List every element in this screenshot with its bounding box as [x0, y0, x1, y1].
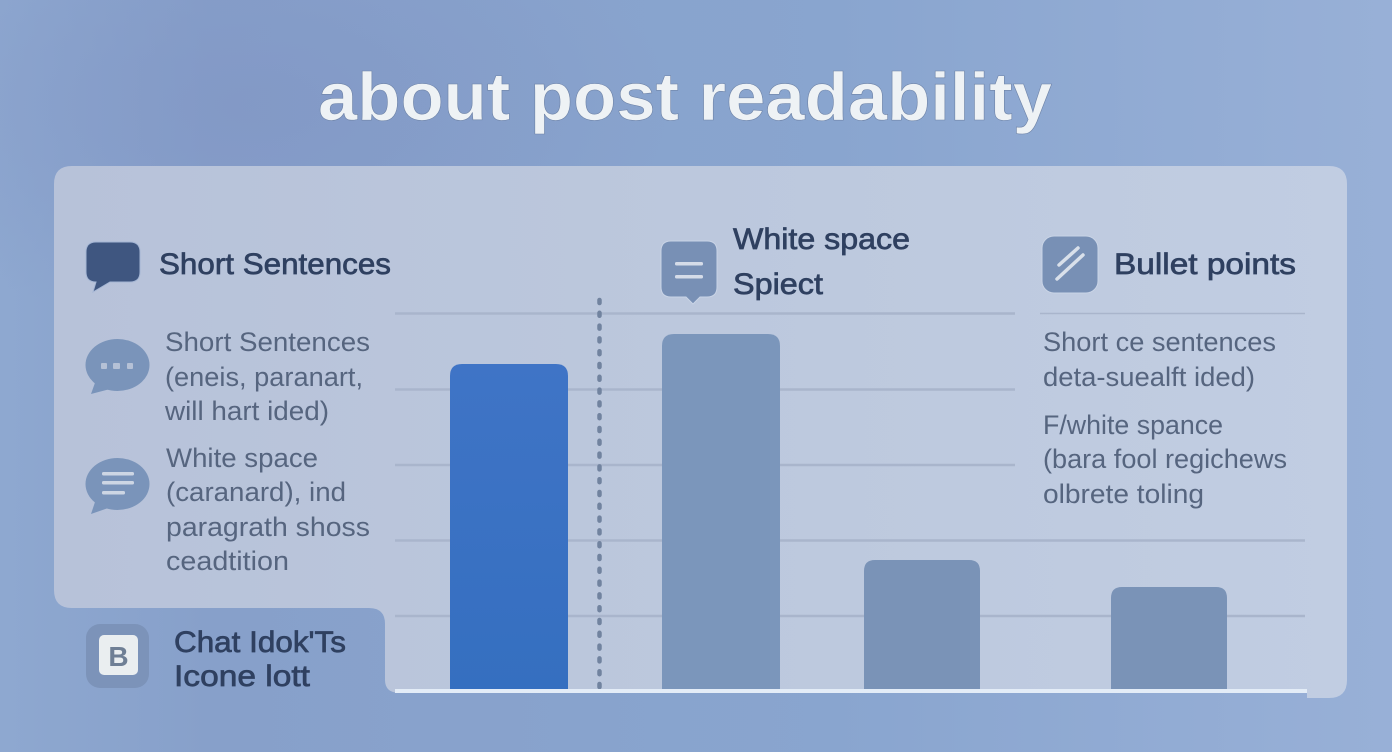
- icon: slashes square: [1042, 236, 1098, 293]
- text block: left white space: (caranard), ind: [166, 477, 346, 507]
- text block: left white space: paragrath shoss: [166, 512, 370, 542]
- text block: right short sentences: Short ce sentences: [1043, 327, 1276, 357]
- text block: left white space: ceadtition: [166, 546, 289, 576]
- chart: bar chart: [395, 300, 1307, 693]
- panel: main card: [54, 166, 1347, 698]
- dotted divider: [597, 300, 602, 692]
- text block: left white space: [86, 443, 370, 576]
- heading: White space Spiect: [661, 223, 910, 304]
- text block: left short sentences: [86, 327, 370, 426]
- title: about post readability: [318, 59, 1052, 135]
- heading: White space Spiect: Spiect: [733, 268, 824, 301]
- heading: Bullet points: [1042, 236, 1296, 293]
- heading: Short Sentences: Short Sentences: [159, 248, 391, 281]
- bar: second: [662, 334, 780, 689]
- text block: right short sentences: deta-suealft ided): [1043, 362, 1255, 392]
- footer label: Chat Idok'Ts: Icone lott: [174, 660, 311, 693]
- text block: left white space: White space: [166, 443, 318, 473]
- icon: rectangular bubble with lines: [661, 241, 717, 304]
- icon: B badge: [86, 624, 149, 688]
- bar: fourth: [1111, 587, 1227, 689]
- heading: White space Spiect: White space: [733, 223, 910, 256]
- text block: right white space: [1043, 410, 1287, 509]
- heading: Short Sentences: [86, 242, 391, 292]
- icon: dark speech bubble: [86, 242, 140, 292]
- text block: right white space: F/white spance: [1043, 410, 1223, 440]
- chart baseline: [395, 689, 1307, 693]
- icon: bubble with lines: [86, 458, 150, 514]
- text block: left short sentences: (eneis, paranart,: [165, 362, 363, 392]
- text block: left short sentences: will hart ided): [164, 396, 329, 426]
- bar: third: [864, 560, 980, 689]
- text block: right white space: (bara fool regichews: [1043, 444, 1287, 474]
- footer label: Chat Idok'Ts: [86, 624, 346, 693]
- text block: left short sentences: Short Sentences: [165, 327, 370, 357]
- icon: B badge: B: [108, 641, 129, 672]
- heading: Bullet points: Bullet points: [1114, 248, 1296, 281]
- text block: right white space: olbrete toling: [1043, 479, 1204, 509]
- bar: blue: [450, 364, 568, 689]
- footer label: Chat Idok'Ts: Chat Idok'Ts: [174, 626, 346, 659]
- text block: right short sentences: [1043, 327, 1276, 392]
- icon: bubble with dots: [86, 339, 150, 394]
